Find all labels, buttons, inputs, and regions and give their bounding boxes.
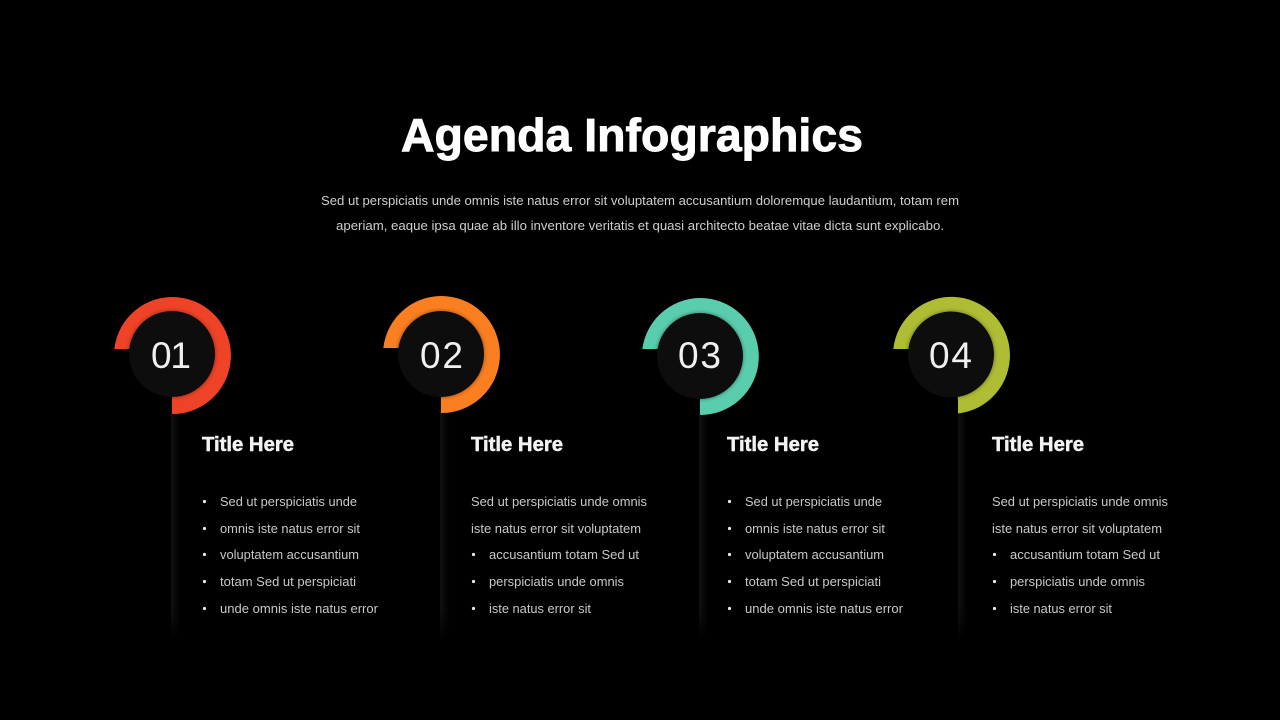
heading 3: Title Here <box>727 434 819 456</box>
number badge 4: 04 <box>929 335 972 376</box>
title: Agenda Infographics <box>401 109 863 161</box>
ring 4 <box>893 297 1010 414</box>
number badge 1 <box>129 311 215 397</box>
timeline stem 1 <box>171 400 180 640</box>
bullet list 3: omnis iste natus error sit <box>745 522 886 536</box>
ring 1 <box>114 297 231 414</box>
timeline stem 3 <box>699 400 708 640</box>
body list 4: perspiciatis unde omnis <box>1010 575 1145 589</box>
bullet list 1 <box>203 495 378 616</box>
ring 2 <box>383 296 500 413</box>
heading 4: Title Here <box>992 434 1084 456</box>
intro paragraph: aperiam, eaque ipsa quae ab illo inventore veritatis et quasi architecto beatae vitae dicta sunt explicabo. <box>336 219 944 233</box>
bullet list 3: unde omnis iste natus error <box>745 602 903 616</box>
body list 4 <box>992 495 1168 616</box>
bullet list 3 <box>728 495 903 616</box>
body list 2: iste natus error sit voluptatem <box>471 522 641 536</box>
number badge 2 <box>398 311 484 397</box>
number badge 1: 01 <box>151 335 191 376</box>
intro paragraph: Sed ut perspiciatis unde omnis iste natus error sit voluptatem accusantium doloremque laudantium, totam rem <box>321 194 959 208</box>
number badge 4 <box>908 312 994 398</box>
body list 4: iste natus error sit voluptatem <box>992 522 1162 536</box>
bullet list 1: voluptatem accusantium <box>220 548 359 562</box>
timeline stem 2 <box>440 400 449 640</box>
column 2 <box>383 296 647 640</box>
number badge 3 <box>657 313 743 399</box>
heading 1: Title Here <box>202 434 294 456</box>
column 1 <box>114 297 378 640</box>
body list 4: iste natus error sit <box>1010 602 1113 616</box>
column 4 <box>893 297 1168 640</box>
body list 4: Sed ut perspiciatis unde omnis <box>992 495 1168 509</box>
bullet list 1: unde omnis iste natus error <box>220 602 378 616</box>
intro paragraph <box>321 194 959 233</box>
bullet list 1: totam Sed ut perspiciati <box>220 575 356 589</box>
bullet list 1: Sed ut perspiciatis unde <box>220 495 357 509</box>
body list 4: accusantium totam Sed ut <box>1010 548 1161 562</box>
bullet list 3: Sed ut perspiciatis unde <box>745 495 882 509</box>
bullet list 3: voluptatem accusantium <box>745 548 884 562</box>
column 3 <box>642 298 903 640</box>
bullet list 3: totam Sed ut perspiciati <box>745 575 881 589</box>
body list 2 <box>471 495 647 616</box>
body list 2: accusantium totam Sed ut <box>489 548 640 562</box>
body list 2: perspiciatis unde omnis <box>489 575 624 589</box>
ring 3 <box>642 298 759 415</box>
body list 2: iste natus error sit <box>489 602 592 616</box>
heading 2: Title Here <box>471 434 563 456</box>
body list 2: Sed ut perspiciatis unde omnis <box>471 495 647 509</box>
number badge 3: 03 <box>678 335 721 376</box>
timeline stem 4 <box>958 400 967 640</box>
number badge 2: 02 <box>420 335 463 376</box>
bullet list 1: omnis iste natus error sit <box>220 522 361 536</box>
